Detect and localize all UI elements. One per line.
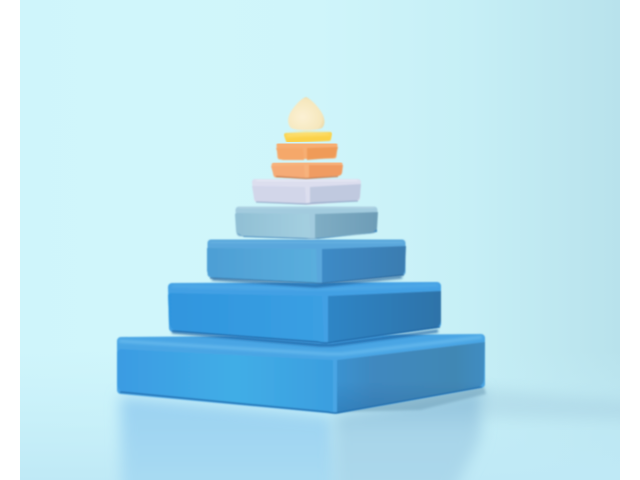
block 1: large blue base [117, 337, 485, 413]
floor reflection and shadow [120, 387, 640, 480]
block 6: lower orange layer [271, 164, 343, 178]
block 7: upper orange layer [276, 145, 338, 160]
icon: cream drop on top [288, 97, 324, 130]
contact shadow under block 3 [212, 277, 402, 286]
block 5: lavender layer [252, 180, 361, 204]
block 2: blue layer [168, 285, 441, 343]
block 8: yellow layer [286, 131, 330, 141]
block 3: mid blue layer [207, 242, 406, 284]
contact shadow under block 2 [172, 331, 438, 345]
block 4: pale blue layer [235, 207, 378, 239]
